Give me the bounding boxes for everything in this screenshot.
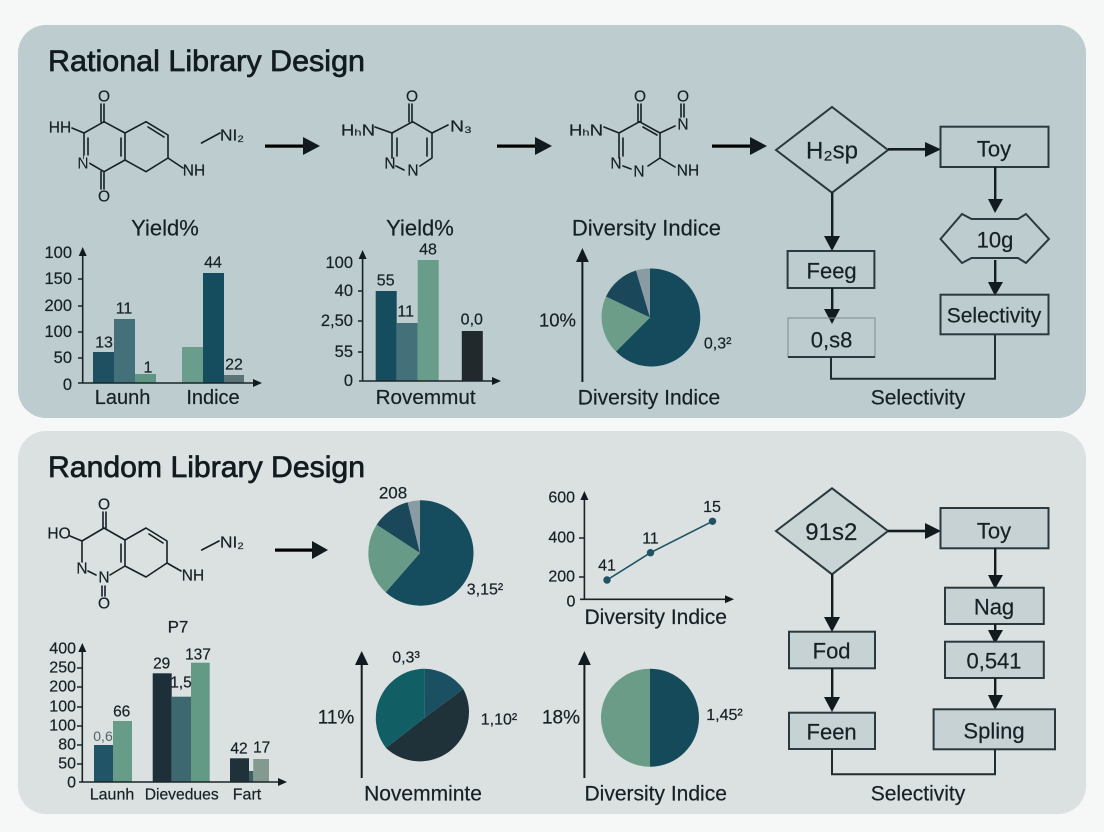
bar chart 2: 55 [377, 272, 395, 290]
molecule 2 [341, 88, 472, 180]
line chart: 11 [642, 530, 659, 548]
flowchart: random: Fod [813, 638, 851, 664]
bar chart 3: 100 [49, 698, 76, 716]
molecule 3: O [677, 88, 689, 106]
bar chart 1: 0 [63, 376, 72, 394]
molecule 1: HH [49, 120, 71, 136]
bar chart 1: 1 [144, 360, 153, 376]
molecule 2: N [407, 162, 419, 180]
bar chart 3: 80 [58, 736, 76, 754]
flowchart: random: 91s2 [805, 519, 857, 546]
bar chart 1: 13 [95, 334, 113, 352]
molecule 4: HO [47, 526, 71, 542]
pie chart with axis: 11%: 1,10² [481, 712, 518, 728]
panel: random library design [18, 431, 1086, 814]
flowchart: random: Spling [963, 718, 1025, 744]
bar chart 1 [44, 244, 262, 409]
chart title: p7: P7 [168, 618, 188, 636]
flowchart: random: Toy [977, 518, 1011, 544]
pie chart with axis: 11% [318, 650, 518, 806]
bar chart 2: 40 [335, 282, 353, 300]
bar chart 1: 22 [225, 356, 243, 374]
pie chart with axis: 10% [539, 310, 576, 330]
molecule 3: N [677, 116, 689, 134]
heading: random library design: Random Library Design [48, 451, 365, 484]
flowchart: random [776, 488, 1055, 806]
bar chart 3: 137 [185, 646, 211, 664]
bar chart 1: 150 [44, 270, 72, 288]
flowchart: rational: H₂sp [806, 138, 858, 164]
bar chart 3: Launh [90, 786, 134, 804]
bar chart 2: 2,50 [321, 312, 353, 330]
arrow [712, 137, 767, 155]
molecule 3: NH [677, 162, 699, 180]
pie chart with axis: 18% [542, 651, 743, 806]
bar chart 3: 66 [113, 704, 130, 720]
molecule 4: N [76, 560, 88, 578]
flowchart: rational: 10g [977, 228, 1013, 252]
bar chart 1: Launh [95, 387, 150, 409]
arrow [275, 541, 328, 559]
molecule 3 [569, 88, 699, 180]
pie chart with axis: 0,3² [704, 336, 732, 352]
bar chart 2 [321, 242, 501, 409]
bar chart 3: 1,5 [170, 674, 192, 692]
bar chart 3: 0 [67, 774, 76, 792]
bar chart 2: 0,0 [461, 312, 483, 328]
molecule 4: NI₂ [220, 534, 244, 552]
bar chart 3: 42 [230, 740, 248, 758]
molecule 2: N [384, 156, 396, 172]
molecule 3: N [633, 164, 645, 180]
line chart: 41 [598, 558, 616, 574]
flowchart: random: Feen [807, 720, 857, 744]
chart title: yield 2: Yield% [386, 216, 454, 240]
bar chart 3 [49, 640, 287, 804]
molecule 1: O [98, 88, 110, 106]
molecule 4: N [98, 570, 110, 586]
bar chart 2: 55 [335, 343, 353, 361]
molecule 4: O [98, 496, 110, 514]
line chart: 400 [548, 530, 575, 546]
pie chart with axis: 18%: 1,45² [706, 707, 743, 724]
line chart: 0 [567, 594, 576, 610]
pie chart with axis: 11%: 11% [318, 708, 354, 728]
flowchart: rational: Selectivity [871, 386, 966, 410]
molecule 1 [49, 88, 244, 206]
bar chart 1: Indice [186, 387, 240, 409]
bar chart 3: 250 [49, 660, 76, 676]
line chart: Diversity Indice [585, 606, 727, 629]
flowchart: random: 0,541 [966, 648, 1022, 674]
flowchart: rational: Selectivity [947, 304, 1042, 328]
panel: rational library design [18, 25, 1086, 418]
flowchart: rational: Feeg [807, 258, 857, 284]
bar chart 2: 48 [419, 242, 437, 258]
line chart: 15 [703, 499, 721, 516]
pie chart with axis: 18%: Diversity Indice [585, 782, 727, 806]
bar chart 1: 100 [44, 323, 72, 341]
bar chart 3: Dievedues [145, 786, 219, 804]
flowchart: random: Nag [974, 594, 1014, 620]
chart title: yield 1: Yield% [131, 216, 199, 240]
molecule 2: O [406, 88, 418, 106]
bar chart 3: Fart [233, 786, 262, 804]
arrow [265, 137, 320, 155]
molecule 3: O [634, 88, 646, 106]
bar chart 3: 0,6 [93, 728, 113, 744]
pie chart with axis: 11%: Novemminte [364, 782, 482, 806]
molecule 3: N [610, 156, 622, 172]
molecule 1: NI₂ [220, 128, 244, 144]
bar chart 1: 11 [116, 300, 132, 318]
molecule 1: N [77, 156, 89, 172]
bar chart 3: 100 [49, 718, 76, 734]
flowchart: random: Selectivity [871, 782, 966, 806]
bar chart 2: 11 [397, 304, 414, 320]
molecule 4: NH [182, 568, 204, 584]
flowchart: rational [776, 107, 1049, 410]
arrow [497, 137, 552, 155]
flowchart: rational: Toy [977, 136, 1011, 162]
pie chart with axis: 18%: 18% [542, 708, 580, 728]
bar chart 3: 17 [253, 740, 270, 756]
molecule 2: N₃ [450, 118, 472, 136]
pie chart large: 3,15² [467, 582, 504, 598]
molecule 4: O [98, 596, 110, 612]
bar chart 3: 50 [58, 756, 76, 772]
line chart [548, 490, 734, 629]
heading: rational library design: Rational Library Design [48, 45, 365, 78]
line chart: 200 [548, 568, 575, 586]
bar chart 2: Rovemmut [376, 387, 476, 409]
bar chart 3: 400 [49, 640, 76, 658]
chart title: diversity indice: Diversity Indice [572, 216, 721, 240]
molecule 1: NH [183, 162, 205, 180]
bar chart 2: 100 [325, 254, 353, 272]
line chart: 600 [548, 490, 575, 506]
bar chart 1: 200 [44, 297, 72, 315]
bar chart 1: 44 [204, 254, 222, 272]
bar chart 3: 29 [153, 656, 170, 672]
bar chart 1: 100 [44, 244, 72, 262]
molecule 1: O [98, 188, 110, 206]
bar chart 1: 50 [54, 349, 72, 367]
bar chart 2: 0 [344, 372, 353, 390]
molecule 4 [47, 496, 244, 612]
pie chart with axis: 11%: 0,3³ [392, 650, 420, 666]
flowchart: rational: 0,s8 [811, 328, 852, 352]
molecule 3: HₕN [569, 122, 603, 140]
bar chart 3: 200 [49, 678, 76, 696]
pie chart with axis [539, 248, 732, 410]
pie chart large [368, 484, 504, 606]
pie chart with axis: Diversity Indice [578, 386, 720, 410]
molecule 2: HₕN [341, 122, 375, 140]
pie chart large: 208 [379, 484, 407, 502]
